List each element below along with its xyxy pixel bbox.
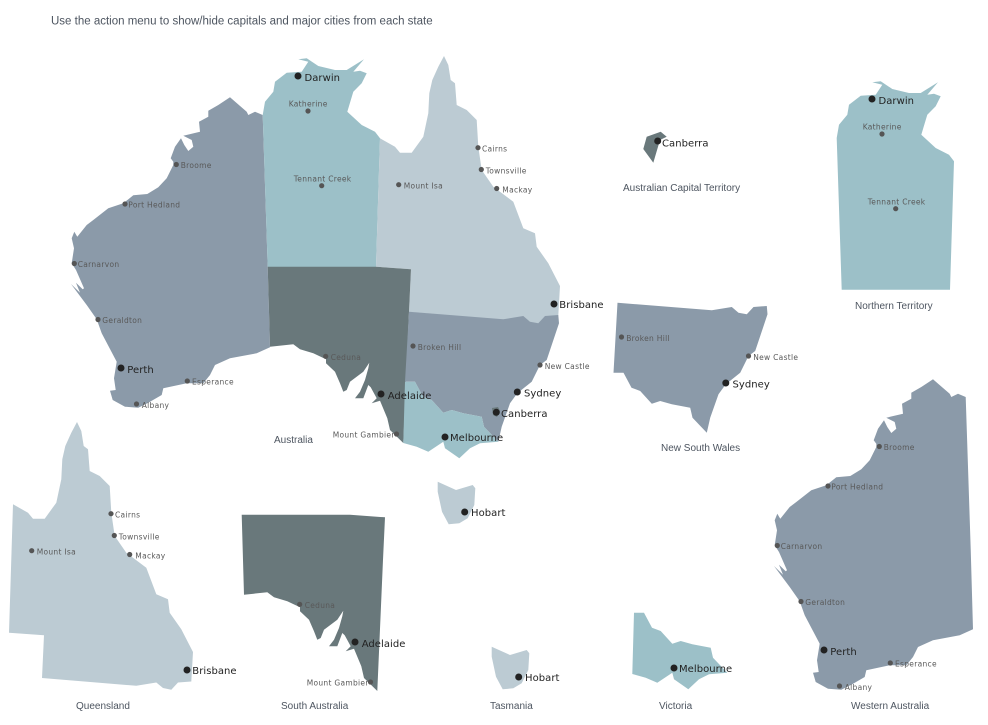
city dots and labels: Port Hedland <box>128 200 180 210</box>
panel: Queensland: Mackay <box>135 552 166 560</box>
title: Use the action menu to show/hide capitals and major cities from each state <box>51 16 433 28</box>
city dots and labels: Geraldton <box>102 316 142 325</box>
region: Victoria <box>403 382 498 458</box>
panel: Northern Territory: Tennant Creek <box>867 198 926 206</box>
panel: New South Wales: New Castle <box>753 353 798 362</box>
city dots and labels: Carnarvon <box>78 260 119 269</box>
region: South Australia <box>268 267 411 443</box>
panel: Queensland: Cairns <box>115 510 140 520</box>
region: Australian Capital Territory <box>492 407 500 417</box>
panel: Northern Territory <box>837 81 954 312</box>
panel: Northern Territory: Katherine <box>863 122 902 132</box>
panel: Queensland: Brisbane <box>192 666 237 677</box>
panel: South Australia <box>242 515 405 712</box>
panel: Victoria: Melbourne <box>679 664 732 675</box>
panel: Western Australia: Albany <box>845 683 873 692</box>
city dots and labels: Tennant Creek <box>293 174 352 184</box>
panel: New South Wales: Broken Hill <box>626 334 670 343</box>
region: Tasmania <box>438 482 475 524</box>
panel: Western Australia: Carnarvon <box>781 542 822 551</box>
city dots and labels: Perth <box>127 365 154 376</box>
panel: Queensland: Townsville <box>118 532 160 542</box>
city dots and labels: Albany <box>142 401 170 410</box>
region: Northern Territory <box>263 58 380 267</box>
panel: Australian Capital Territory <box>623 132 740 194</box>
city dots and labels: Broken Hill <box>418 343 461 352</box>
panel: New South Wales: New South Wales <box>661 443 740 454</box>
label: Australia: Australia <box>274 435 313 446</box>
region: Queensland <box>376 56 560 324</box>
panel: Victoria: Victoria <box>659 701 693 712</box>
panel: Tasmania: Hobart <box>525 673 559 684</box>
panel: Queensland: Queensland <box>76 701 130 712</box>
city dots and labels: Townsville <box>485 166 527 176</box>
panel: Australian Capital Territory: Canberra <box>662 138 709 150</box>
panel: Western Australia <box>774 379 973 712</box>
city dots and labels: Cairns <box>482 144 507 154</box>
panel: Australian Capital Territory: Australian Capital Territory <box>623 183 740 194</box>
panel: Northern Territory: Northern Territory <box>855 301 933 312</box>
region: New South Wales <box>405 312 559 442</box>
panel: New South Wales: Sydney <box>732 380 770 390</box>
panel: Tasmania <box>490 647 559 712</box>
panel: South Australia: Ceduna <box>305 601 335 610</box>
city dots and labels: Mount Gambier <box>333 430 395 440</box>
panel: South Australia: South Australia <box>281 701 349 712</box>
city dots and labels: Canberra <box>501 409 548 420</box>
region: Western Australia <box>71 97 270 408</box>
city dots and labels: Esperance <box>192 378 234 386</box>
panel: Western Australia: Port Hedland <box>831 482 883 492</box>
city dots and labels: Darwin <box>304 73 340 84</box>
panel: South Australia: Mount Gambier <box>307 678 369 688</box>
panel: Western Australia: Esperance <box>895 660 937 668</box>
panel: Victoria <box>632 613 732 712</box>
panel: Queensland <box>9 422 237 712</box>
panel: New South Wales <box>614 303 798 454</box>
panel: Western Australia: Perth <box>830 647 857 658</box>
panel: Tasmania: Tasmania <box>490 701 533 712</box>
city dots and labels: Melbourne <box>450 433 503 444</box>
city dots and labels: Hobart <box>471 508 505 519</box>
city dots and labels: Mackay <box>502 186 533 194</box>
panel: South Australia: Adelaide <box>362 639 405 650</box>
city dots and labels: Ceduna <box>331 353 361 362</box>
city dots and labels: Adelaide <box>388 391 431 402</box>
panel: Western Australia: Broome <box>884 443 915 452</box>
panel: Western Australia: Geraldton <box>805 598 845 607</box>
city dots and labels: Brisbane <box>559 300 604 311</box>
city dots and labels: Broome <box>181 161 212 170</box>
map: Australia <box>71 56 604 524</box>
city dots and labels: Katherine <box>289 100 328 108</box>
city dots and labels: Mount Isa <box>404 182 443 190</box>
panel: Queensland: Mount Isa <box>37 548 76 556</box>
panel: Western Australia: Western Australia <box>851 701 930 712</box>
city dots and labels <box>72 72 604 519</box>
panel: Northern Territory: Darwin <box>878 96 914 107</box>
city dots and labels: Sydney <box>524 388 561 400</box>
city dots and labels: New Castle <box>545 362 590 371</box>
